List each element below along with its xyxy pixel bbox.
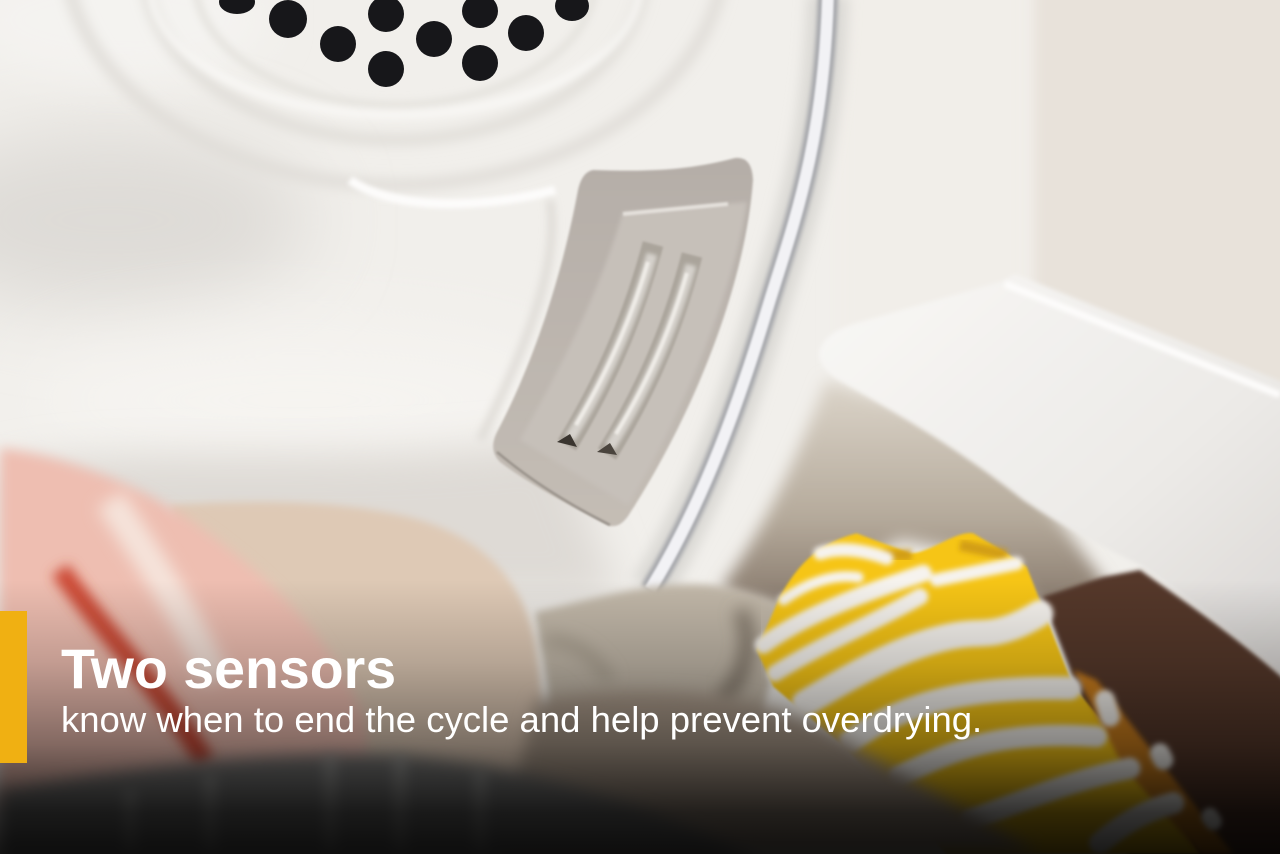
shelf baffle xyxy=(819,274,1280,690)
sensor plate xyxy=(493,158,753,526)
yellow striped cloth xyxy=(757,533,1233,854)
dark shadow under shelf xyxy=(1042,570,1280,854)
sensor bar right xyxy=(597,255,692,455)
pink cloth xyxy=(0,448,370,810)
foreground cloth lower right xyxy=(500,691,1040,854)
subheading: know when to end the cycle and help prevent overdrying. xyxy=(61,699,982,740)
vent holes xyxy=(219,0,589,87)
door gasket xyxy=(650,0,828,590)
drum rear vent rings xyxy=(65,0,725,440)
recess below shelf xyxy=(720,380,1110,610)
sensor bar left xyxy=(557,244,653,447)
accent bar xyxy=(0,611,27,763)
bottom dark gradient xyxy=(0,580,1280,854)
beige cloth xyxy=(170,502,542,800)
gray cloth xyxy=(535,584,790,760)
heading: Two sensors xyxy=(61,638,396,700)
gray knit foreground xyxy=(0,754,760,854)
caption xyxy=(61,638,982,740)
